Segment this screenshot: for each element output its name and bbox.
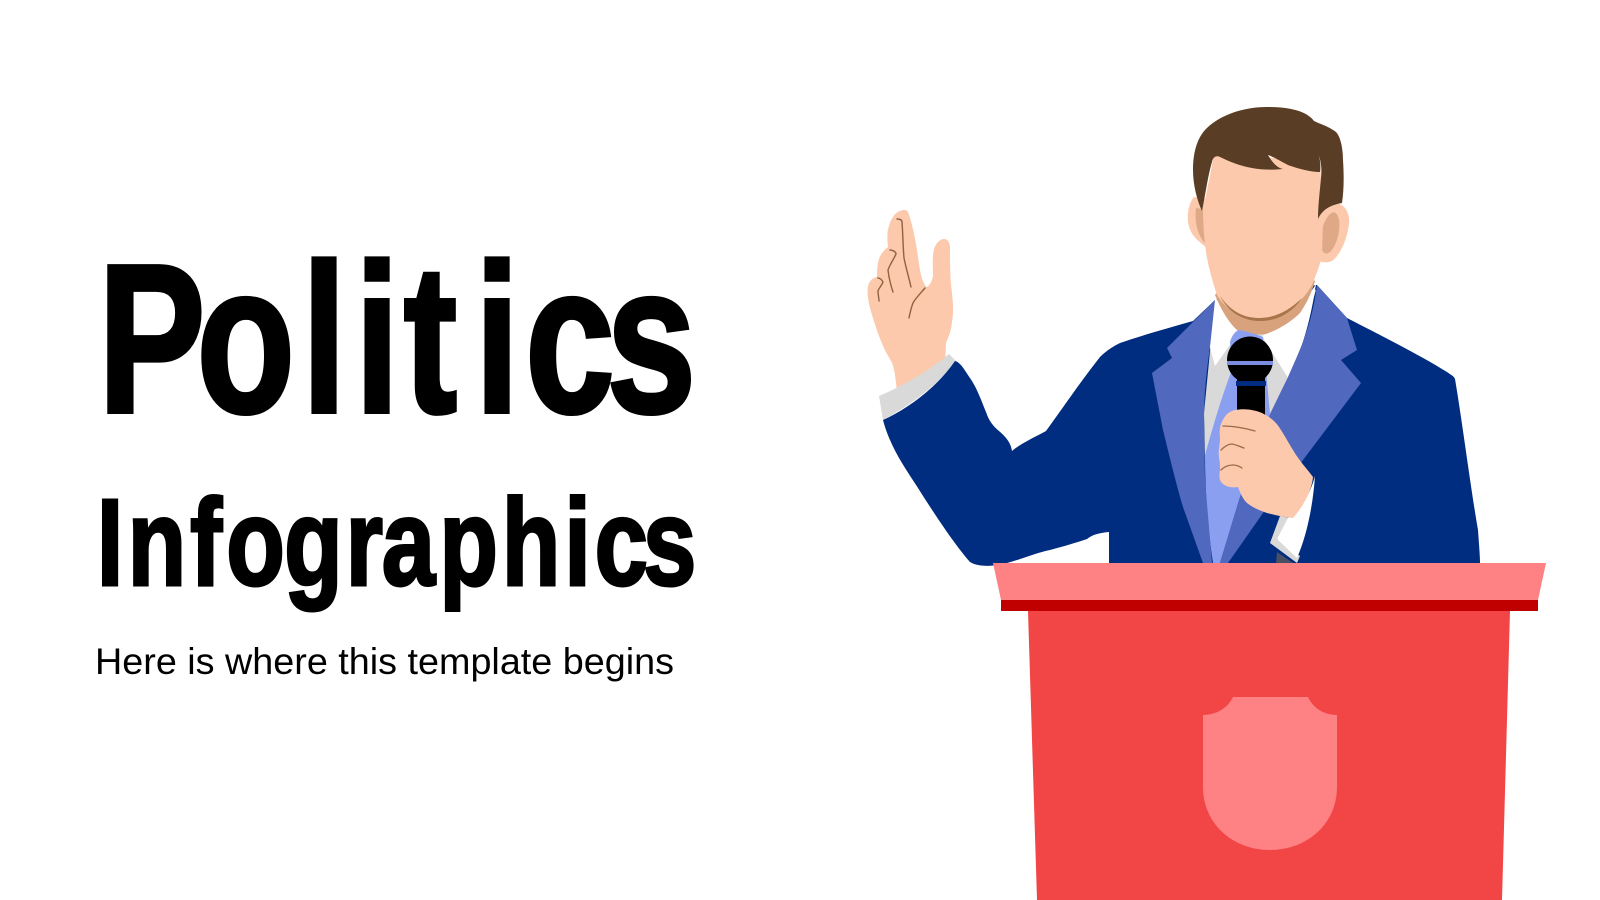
illustration: politician at podium [868, 107, 1546, 900]
podium top [993, 563, 1546, 600]
neck shadow [1215, 270, 1315, 335]
white shirt collar [1209, 284, 1316, 378]
microphone [1227, 336, 1273, 420]
title line: Politics: Politics [98, 221, 696, 457]
right cuff [1270, 476, 1315, 563]
hand finger lines [878, 219, 925, 318]
left shirt cuff [879, 354, 956, 420]
grey shirt [1204, 290, 1316, 462]
podium [993, 563, 1546, 900]
right lapel [1220, 285, 1361, 563]
microphone handle [1237, 375, 1265, 420]
left ear [1188, 197, 1215, 248]
chin line [1220, 296, 1302, 321]
hair [1193, 107, 1344, 219]
microphone collar [1236, 381, 1266, 386]
left lapel [1152, 300, 1215, 563]
podium body [1028, 611, 1510, 900]
head [1188, 107, 1349, 321]
podium trim [1001, 600, 1538, 611]
microphone ring [1227, 361, 1273, 365]
subtitle: Here is where this template begins [95, 641, 674, 682]
hand holding microphone [1219, 409, 1313, 518]
raised hand [868, 210, 953, 392]
collar right [1262, 284, 1316, 378]
right ear [1318, 203, 1349, 262]
collar left [1209, 298, 1245, 366]
podium shield emblem [1203, 697, 1337, 850]
microphone head [1227, 336, 1273, 384]
dark suit jacket [883, 285, 1480, 566]
title line: Infographics: Infographics [97, 475, 696, 612]
title [97, 221, 696, 612]
tie [1205, 330, 1270, 563]
face [1203, 155, 1323, 318]
grip lines [1221, 426, 1255, 470]
